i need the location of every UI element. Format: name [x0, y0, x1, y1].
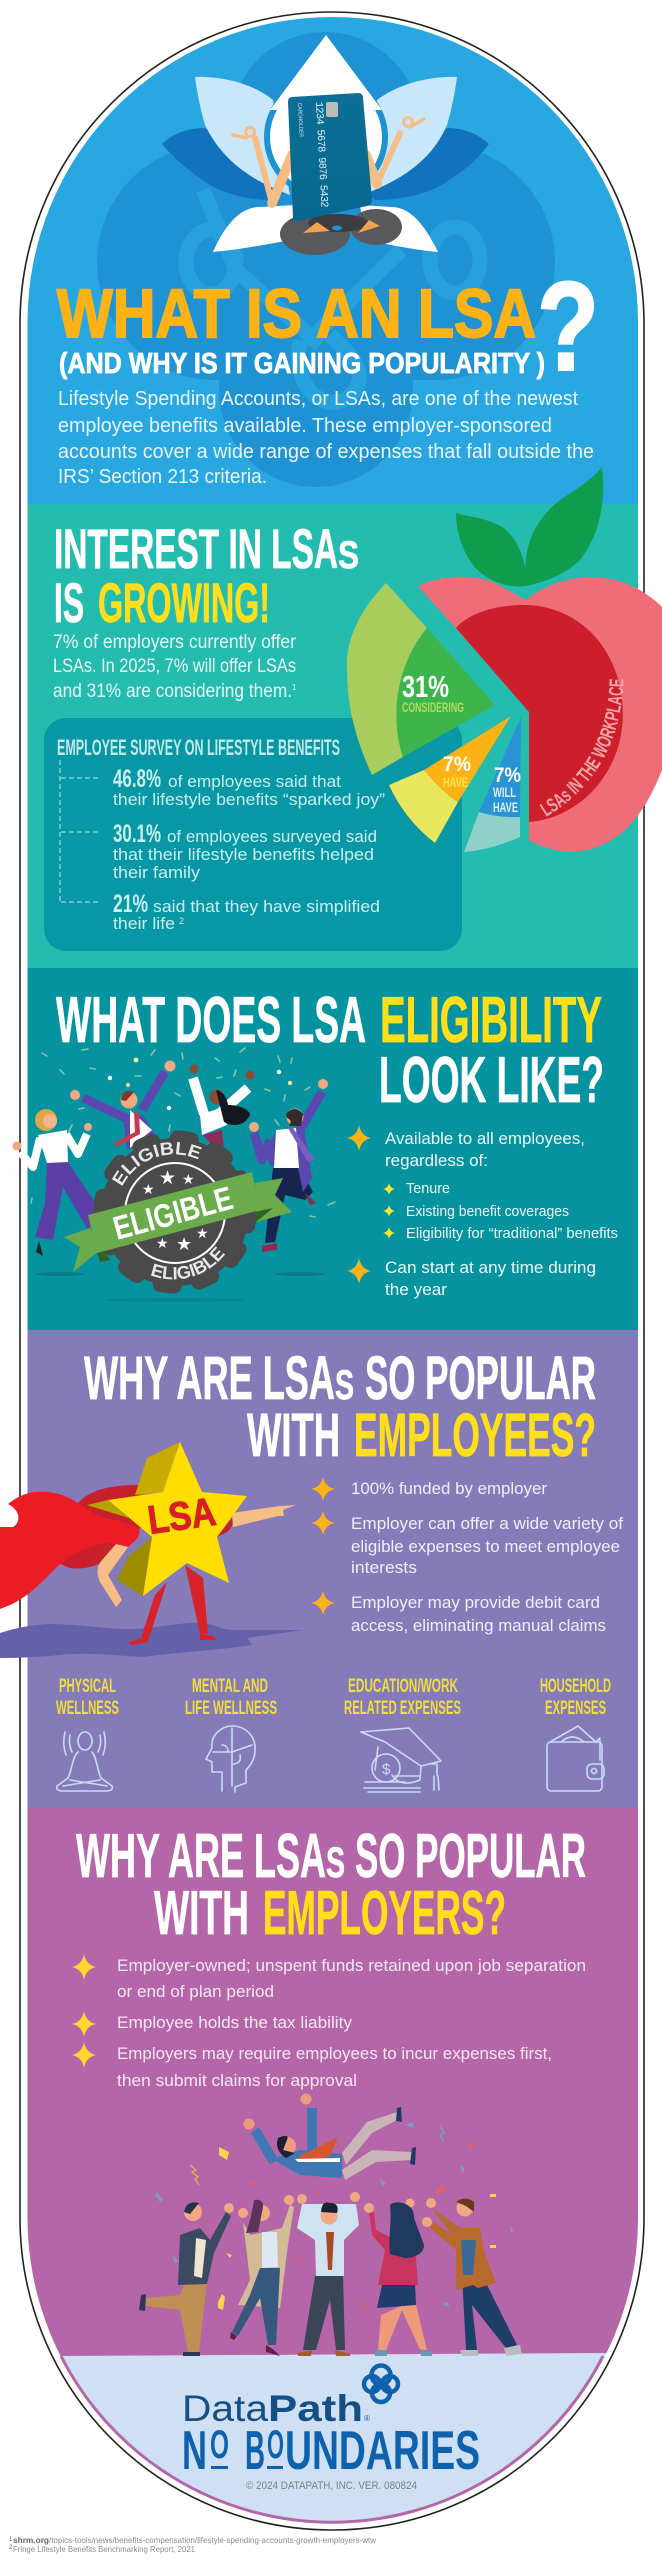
person 3	[297, 2192, 360, 2356]
eligibility bullets: regardless of:	[385, 1151, 488, 1170]
heading: popular with employers: S	[326, 1839, 345, 1887]
arms	[98, 1505, 296, 1607]
category: mental and life wellness	[185, 1676, 277, 1792]
chart: apple pie chart	[346, 467, 662, 852]
title: (AND WHY IS IT GAINING POPULARITY )	[59, 348, 545, 380]
intro paragraph: employee benefits available. These employer-sponsored	[58, 415, 552, 437]
category: education/work: RELATED EXPENSES	[344, 1698, 461, 1719]
survey items: of employees said that	[168, 772, 341, 791]
slice: considering: CONSIDERING	[402, 699, 464, 715]
heading: interest in LSAs: S	[338, 534, 359, 577]
eligible badge: ★	[156, 1235, 169, 1251]
panel: employee survey	[44, 718, 462, 951]
employee bullets: eligible expenses to meet employee	[351, 1537, 620, 1556]
arms	[233, 118, 424, 203]
survey items: 21%	[113, 890, 148, 918]
category: mental and life wellness: LIFE WELLNESS	[185, 1698, 277, 1719]
star label: LSA	[145, 1490, 219, 1543]
intro paragraph: Lifestyle Spending Accounts, or LSAs, are one of the newest	[58, 388, 578, 410]
person 1	[139, 2202, 234, 2356]
heading: popular with employers: WHY ARE LSA	[76, 1822, 326, 1891]
icon: sparkle bullets	[311, 1477, 335, 1615]
slice: have: 7%	[443, 753, 471, 776]
employer bullets: then submit claims for approval	[117, 2071, 357, 2090]
eligible badge: ELIGIBLE	[112, 1142, 202, 1186]
icon: meditating credit card on lotus	[162, 35, 489, 255]
employer bullets: Employers may require employees to incur expenses first,	[117, 2044, 552, 2063]
star	[87, 1442, 247, 1596]
slice: considering: 31%	[402, 669, 449, 704]
eligible badge: ★	[142, 1181, 155, 1197]
heading: popular with employees: WITH	[247, 1401, 340, 1469]
illustration: team tossing employer	[139, 2094, 522, 2356]
intro paragraph: IRS’ Section 213 criteria.	[58, 466, 267, 488]
illustration: LSA superhero star	[0, 1442, 303, 1658]
icon: sparkle bullets	[72, 1954, 96, 2068]
footer edge	[61, 2356, 603, 2522]
survey items: 30.1%	[113, 820, 161, 848]
survey heading: EMPLOYEE SURVEY ON LIFESTYLE BENEFITS	[57, 735, 340, 760]
eligible badge: ★	[176, 1234, 192, 1254]
tagline: B	[245, 2419, 265, 2481]
employee bullets: Employer may provide debit card	[351, 1593, 600, 1612]
category: education/work: EDUCATION/WORK	[348, 1676, 458, 1697]
heading: eligibility: WHAT DOES LSA	[56, 983, 366, 1056]
slice: considering	[347, 583, 495, 775]
eligibility bullets: the year	[385, 1280, 447, 1299]
eligible badge: ★	[159, 1168, 176, 1189]
ribbon	[64, 1228, 100, 1272]
employee bullets: access, eliminating manual claims	[351, 1616, 606, 1635]
employee bullets: interests	[351, 1558, 417, 1577]
title: WHAT IS AN LSA	[57, 275, 536, 352]
eligible badge: ELIGIBLE	[109, 1179, 237, 1247]
heading: popular with employees: WHY ARE LSA	[84, 1344, 335, 1412]
panel: eligibility background	[27, 968, 639, 1330]
interest text: LSAs. In 2025, 7% will offer LSAs	[53, 656, 296, 677]
cape	[0, 1485, 233, 1609]
heading: eligibility	[56, 983, 604, 1116]
panel: employees background	[27, 1330, 639, 1808]
ground shadows	[36, 1272, 326, 1302]
eligibility bullets: Available to all employees,	[385, 1129, 585, 1148]
person 2	[230, 2195, 294, 2356]
slice: have: HAVE	[443, 774, 468, 790]
wordmark: Path	[268, 2388, 363, 2429]
survey items: their family	[113, 863, 201, 882]
heading: interest in LSAs: IS	[54, 571, 84, 634]
eligible badge: ★	[196, 1225, 209, 1241]
copyright: © 2024 DATAPATH, INC. VER. 080824	[246, 2480, 417, 2492]
heading: interest in LSAs	[54, 517, 359, 634]
slice: have	[389, 716, 511, 843]
footnotes: shrm.org	[13, 2535, 49, 2545]
title: ?	[537, 256, 599, 397]
apple label: LSAs IN THE WORKPLACE	[540, 679, 624, 816]
footnotes	[9, 2535, 377, 2554]
confetti	[31, 1048, 335, 1217]
interest text: 1	[292, 683, 297, 692]
survey items	[113, 765, 385, 933]
title	[57, 256, 599, 397]
survey items: said that they have simplified	[153, 897, 380, 916]
footnotes: /topics-tools/news/benefits-compensation/lifestyle-spending-accounts-growth-employers-wtw	[49, 2535, 377, 2545]
heading: popular with employees: S	[335, 1361, 354, 1408]
category: physical wellness	[56, 1676, 119, 1791]
man with tie	[70, 1060, 176, 1150]
panel: logo footer background	[62, 2353, 606, 2521]
tagline: N	[182, 2419, 207, 2481]
survey items: 46.8%	[113, 765, 161, 793]
interest text: 7% of employers currently offer	[53, 632, 297, 653]
apple body slice	[418, 577, 662, 852]
wordmark: Data	[182, 2388, 268, 2429]
eligible badge: ★	[182, 1171, 195, 1187]
logo icon	[364, 2366, 398, 2402]
category: physical wellness: PHYSICAL	[59, 1676, 116, 1697]
woman center	[190, 1064, 254, 1150]
category: physical wellness: WELLNESS	[56, 1698, 119, 1719]
flying man	[244, 2094, 416, 2180]
slice: will have: WILL	[493, 784, 516, 800]
confetti	[155, 2122, 514, 2310]
slice: will have	[464, 717, 521, 852]
employer bullets: Employer-owned; unspent funds retained upon job separation	[117, 1956, 586, 1975]
eligibility bullets: Can start at any time during	[385, 1258, 596, 1277]
footnotes: 2	[9, 2545, 13, 2551]
survey items: of employees surveyed said	[167, 827, 377, 846]
wordmark	[182, 2388, 370, 2429]
card: 1234 5678 9876 5432	[312, 102, 330, 208]
employee bullets: Employer can offer a wide variety of	[351, 1514, 623, 1533]
category: mental and life wellness: MENTAL AND	[192, 1676, 268, 1697]
panel: what is an LSA background	[27, 15, 639, 504]
card	[288, 93, 372, 221]
illustration: celebrating people with eligible badge	[12, 1047, 336, 1302]
legs	[128, 1565, 217, 1645]
category: education/work	[344, 1676, 461, 1792]
survey items: 2	[179, 916, 184, 926]
man right	[249, 1079, 328, 1252]
survey items: their life	[113, 914, 175, 933]
eligibility bullets: Eligibility for “traditional” benefits	[406, 1226, 618, 1242]
tagline: UNDARIES	[285, 2419, 480, 2481]
card: CARDHOLDER	[296, 103, 304, 137]
employer bullets	[72, 1954, 586, 2090]
slice: will have: HAVE	[493, 799, 518, 815]
intro paragraph	[58, 388, 594, 488]
interest text	[53, 632, 297, 702]
interest text: and 31% are considering them.	[53, 681, 292, 702]
category: household expenses: EXPENSES	[545, 1698, 606, 1719]
footnotes: 1	[9, 2537, 13, 2543]
employee bullets: 100% funded by employer	[351, 1479, 547, 1498]
tagline	[182, 2419, 480, 2481]
tagline: O	[267, 2423, 284, 2467]
person 4	[364, 2198, 432, 2356]
intro paragraph: accounts cover a wide range of expenses that fall outside the	[58, 441, 594, 463]
heading: popular with employers	[76, 1822, 586, 1948]
category: education/work: $	[382, 1761, 391, 1778]
eligible badge	[64, 1130, 292, 1294]
heading: popular with employers: WITH	[154, 1879, 249, 1948]
wordmark: ®	[364, 2414, 370, 2423]
ground shadow	[0, 1623, 303, 1658]
slice: will have: 7%	[494, 764, 521, 787]
panel: employers background	[27, 1808, 639, 2523]
employee bullets	[311, 1477, 623, 1635]
apple leaves	[456, 467, 603, 586]
eligibility bullets: Existing benefit coverages	[406, 1204, 569, 1220]
footnotes: Fringe Lifestyle Benefits Benchmarking Report, 2021	[13, 2544, 195, 2554]
panel: interest in LSAs background	[27, 504, 639, 968]
eligibility bullets	[347, 1125, 618, 1299]
lotus petals	[162, 35, 489, 252]
employer bullets: Employee holds the tax liability	[117, 2013, 352, 2032]
dashed connector arrows	[60, 760, 100, 902]
survey items: that their lifestyle benefits helped	[113, 845, 374, 864]
employer bullets: or end of plan period	[117, 1982, 274, 2001]
heading: popular with employees	[84, 1344, 596, 1469]
woman left	[12, 1109, 100, 1256]
category: household expenses	[540, 1676, 611, 1791]
expense categories	[56, 1676, 611, 1792]
icon: sparkle bullets	[347, 1125, 371, 1284]
survey items: their lifestyle benefits “sparked joy”	[113, 790, 385, 809]
category: household expenses: HOUSEHOLD	[540, 1676, 611, 1697]
heading: interest in LSAs: GROWING!	[98, 571, 270, 634]
tagline: O	[210, 2423, 229, 2467]
heading: interest in LSAs: INTEREST IN LSA	[54, 517, 338, 580]
logo: DataPath	[182, 2366, 480, 2492]
eligible badge: ELIGIBLE	[151, 1246, 225, 1280]
eligibility bullets: Tenure	[406, 1181, 450, 1197]
person 5	[422, 2198, 522, 2356]
legs	[280, 209, 402, 255]
watermark logo	[97, 32, 555, 487]
